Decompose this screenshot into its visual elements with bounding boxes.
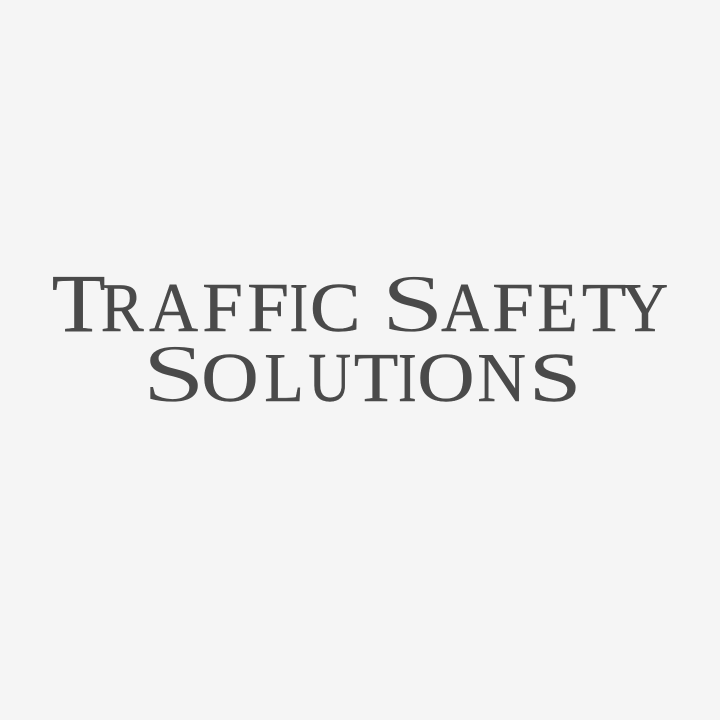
title line 2: O <box>201 340 259 417</box>
title <box>52 257 668 419</box>
title line 1: R <box>101 270 144 347</box>
title line 1: Y <box>622 270 668 347</box>
title line 1: S <box>381 257 444 349</box>
title line 1: I <box>290 270 308 347</box>
title line 1: C <box>310 270 361 347</box>
title line 2: T <box>354 340 398 417</box>
title line 1: E <box>537 270 578 347</box>
title line 1: F <box>247 270 289 347</box>
title line 2: S <box>529 340 581 417</box>
title line 1: F <box>492 270 534 347</box>
title line 1: T <box>582 270 626 347</box>
title line 2: L <box>264 340 304 417</box>
title line 1: F <box>202 270 243 347</box>
title line 2: I <box>398 340 417 417</box>
title line 2: U <box>308 340 351 417</box>
title line 1: T <box>52 257 106 349</box>
title line 2: O <box>417 340 475 417</box>
title line 1: A <box>441 270 489 347</box>
title line 2: N <box>477 340 526 417</box>
title line 1: A <box>149 270 199 347</box>
title line 2: S <box>142 327 205 419</box>
